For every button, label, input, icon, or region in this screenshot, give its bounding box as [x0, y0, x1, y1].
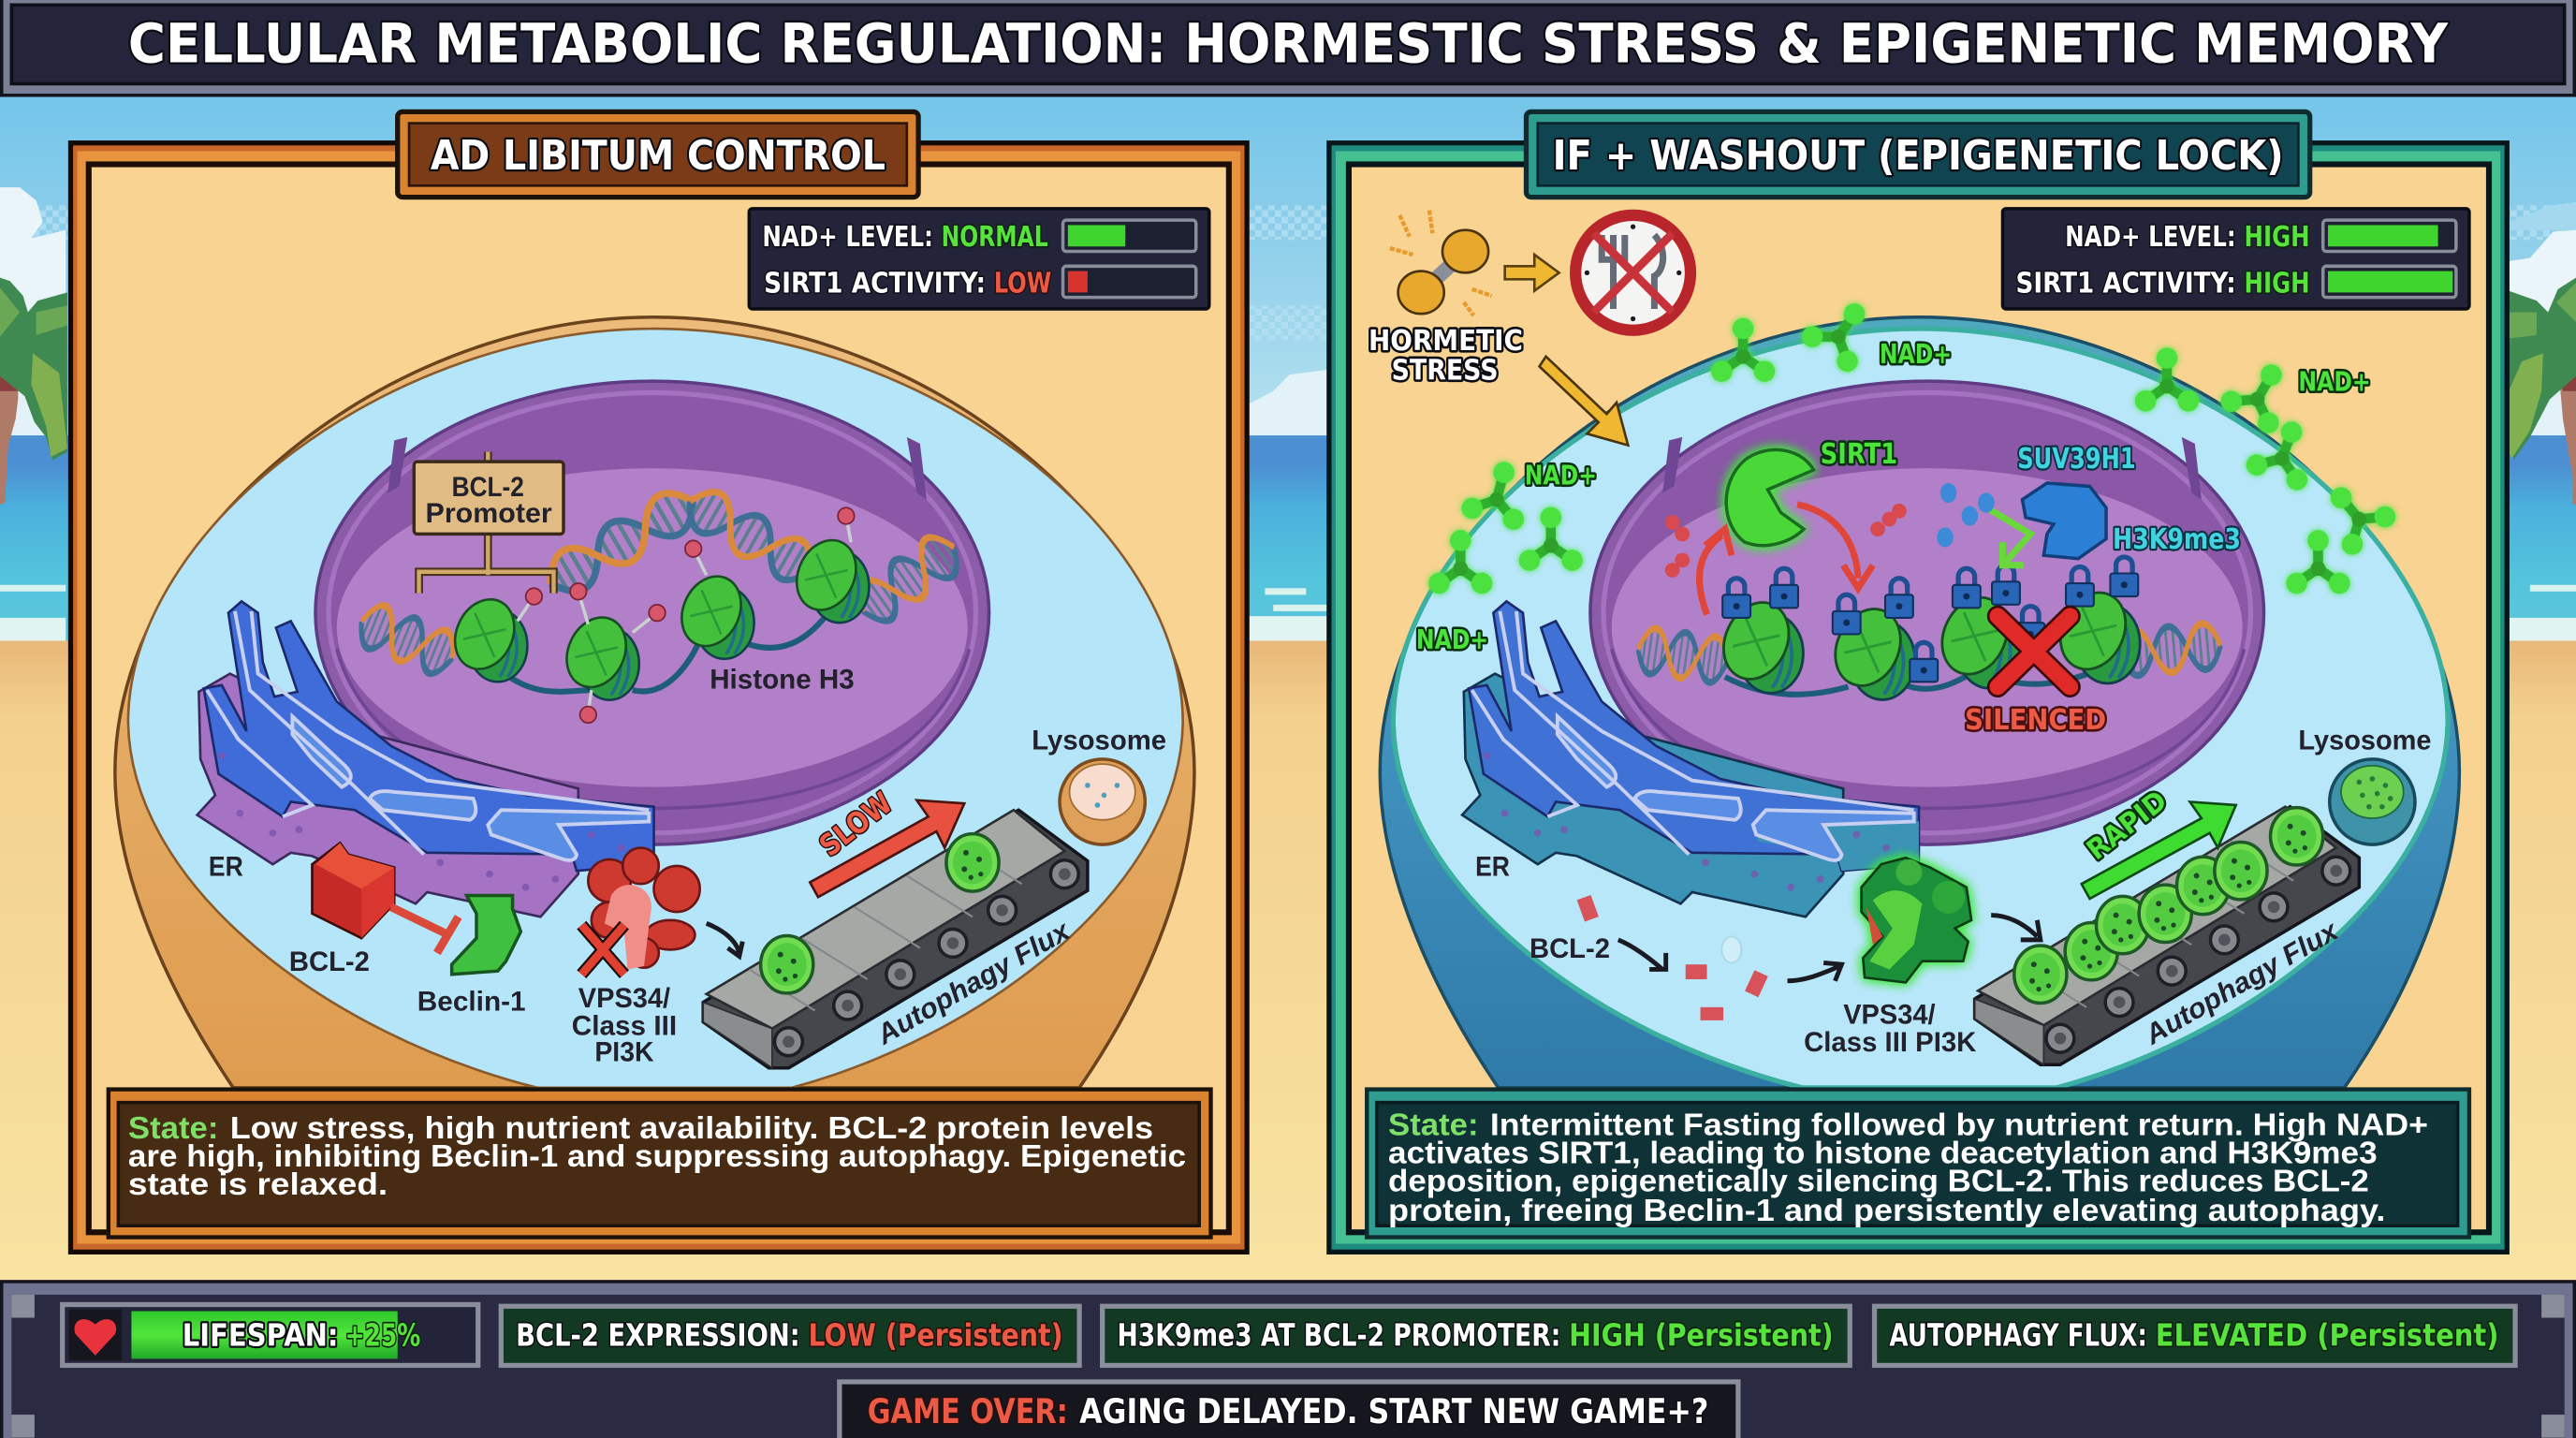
label: VPS34 / Class III PI3K — [572, 983, 677, 1068]
labels: NAD+: NAD+ — [1880, 339, 1952, 370]
label: Lysosome: Lysosome — [2298, 725, 2432, 756]
lifespan meter — [63, 1304, 478, 1365]
VPS34 complex, active — [1862, 858, 1971, 983]
status panel: NAD and SIRT1: SIRT1 ACTIVITY: — [2016, 267, 2236, 300]
badge: IF + washout — [1526, 111, 2310, 198]
icon: no food — [1575, 215, 1690, 330]
NAD+ molecules — [1428, 287, 2400, 594]
game over banner: GAME OVER: — [868, 1391, 1068, 1431]
label: BCL-2: BCL-2 — [289, 946, 370, 977]
status panel: NAD and SIRT1: LOW — [994, 267, 1051, 300]
state box: Low stress, high nutrient availability. BCL-2 protein levels — [230, 1111, 1153, 1146]
label: VPS34 / Class III PI3K: VPS34/ — [578, 983, 670, 1014]
labels: NAD+: NAD+ — [2298, 367, 2371, 398]
bottom HUD bar — [2, 1282, 2574, 1438]
state box — [1367, 1090, 2469, 1238]
Beclin-1 protein — [452, 895, 520, 975]
label: Lysosome: Lysosome — [1032, 725, 1166, 756]
label: VPS34 / Class III PI3K: VPS34/ — [1843, 999, 1936, 1030]
label: Autophagy Flux: Autophagy Flux — [871, 915, 1076, 1051]
game over banner — [840, 1382, 1738, 1438]
status panel: NAD and SIRT1: NAD+ LEVEL: — [2065, 221, 2236, 254]
labels: NAD+ — [1416, 339, 2371, 655]
endoplasmic reticulum — [1462, 601, 1919, 917]
SUV39H1 enzyme — [2023, 483, 2106, 559]
stat: H3K9me3 at promoter: H3K9me3 AT BCL-2 PROMOTER: — [1117, 1316, 1560, 1353]
state box: State: — [1388, 1108, 1479, 1143]
state box: activates SIRT1, leading to histone deacetylation and H3K9me3 — [1388, 1137, 2378, 1171]
status panel: NAD and SIRT1: HIGH — [2244, 267, 2310, 300]
state box: are high, inhibiting Beclin-1 and suppressing autophagy. Epigenetic — [128, 1139, 1186, 1174]
label: Beclin-1: Beclin-1 — [417, 986, 526, 1017]
panel: IF + washout — [1329, 111, 2507, 1252]
stat: BCL-2 expression: BCL-2 EXPRESSION: — [516, 1316, 800, 1353]
stat: BCL-2 expression — [501, 1306, 1079, 1365]
icon: dumbbell — [1390, 211, 1492, 315]
hormetic stress icon: HORMETIC — [1368, 325, 1523, 358]
stat: BCL-2 expression: LOW (Persistent) — [809, 1316, 1063, 1353]
label: VPS34 / Class III PI3K: Class III — [572, 1011, 677, 1042]
title bar — [2, 0, 2574, 95]
SIRT1 enzyme — [1726, 449, 1814, 546]
stat: autophagy flux: ELEVATED (Persistent) — [2156, 1316, 2499, 1353]
labels: NAD+: NAD+ — [1416, 624, 1488, 655]
arrow: stress to nucleus — [1540, 357, 1628, 446]
hormetic stress icon: STRESS — [1392, 354, 1499, 387]
status panel: NAD and SIRT1: NORMAL — [942, 221, 1048, 254]
badge: ad libitum control — [398, 111, 918, 198]
label: SLOW: SLOW — [813, 786, 899, 863]
title text: CELLULAR METABOLIC REGULATION: HORMESTIC STRESS & EPIGENETIC MEMORY — [128, 12, 2449, 76]
label: SIRT1: SIRT1 — [1821, 438, 1897, 471]
label: SUV39H1: SUV39H1 — [2017, 443, 2136, 476]
endoplasmic reticulum — [198, 601, 654, 917]
arrow: to fasting — [1505, 255, 1559, 291]
labels: NAD+: NAD+ — [1525, 461, 1597, 492]
cell — [1380, 317, 2459, 1088]
state box: Intermittent Fasting followed by nutrient return. High NAD+ — [1490, 1108, 2428, 1143]
lifespan meter: LIFESPAN: — [183, 1316, 339, 1353]
label: VPS34 / Class III PI3K: Class III PI3K — [1804, 1027, 1977, 1058]
arrow: slow — [810, 800, 964, 897]
status panel: NAD and SIRT1: SIRT1 ACTIVITY: — [764, 267, 986, 300]
conveyor: autophagy flux rapid — [1975, 807, 2359, 1064]
state box: State: — [128, 1111, 218, 1146]
label: SILENCED: SILENCED — [1965, 704, 2106, 737]
state box: state is relaxed. — [128, 1167, 388, 1202]
BCL-2 fragments and arrows — [1577, 895, 2041, 1020]
panel frame — [70, 143, 1247, 1252]
state box — [109, 1090, 1211, 1238]
label: VPS34 / Class III PI3K — [1804, 999, 1977, 1058]
nucleus — [315, 381, 989, 844]
stat: H3K9me3 at promoter — [1103, 1306, 1850, 1365]
arrow: rapid — [2082, 801, 2236, 899]
status panel: NAD and SIRT1 — [2002, 209, 2469, 309]
label: RAPID: RAPID — [2081, 785, 2174, 867]
state box: deposition, epigenetically silencing BCL-2. This reduces BCL-2 — [1388, 1164, 2369, 1198]
BCL-2 protein with inhibition bar — [312, 843, 459, 953]
stat: autophagy flux — [1875, 1306, 2515, 1365]
arrow to conveyor — [707, 923, 742, 956]
cell — [115, 317, 1194, 1088]
chromatin: silenced DNA with locks — [1634, 557, 2223, 699]
label: VPS34 / Class III PI3K: PI3K — [594, 1037, 654, 1068]
label: ER: ER — [1475, 851, 1510, 882]
status panel: NAD and SIRT1: HIGH — [2244, 221, 2310, 254]
badge: ad libitum control: AD LIBITUM CONTROL — [431, 132, 886, 180]
lysosome — [1060, 759, 1145, 844]
chromatin: relaxed DNA and nucleosomes — [353, 482, 967, 723]
label: BCL-2: BCL-2 — [1530, 933, 1610, 964]
cycle arrows and small molecules — [1665, 483, 2030, 614]
label: H3K9me3: H3K9me3 — [2113, 523, 2241, 556]
label: Histone H3: Histone H3 — [710, 664, 855, 695]
game over banner: AGING DELAYED. START NEW GAME+? — [1079, 1391, 1708, 1431]
sign: BCL-2 promoter: BCL-2 — [452, 472, 524, 503]
sign: BCL-2 promoter: Promoter — [426, 498, 552, 529]
nucleus — [1590, 381, 2264, 844]
state box: protein, freeing Beclin-1 and persistently elevating autophagy. — [1388, 1194, 2385, 1228]
palm tree: right — [2509, 278, 2576, 505]
hormetic stress icon — [1368, 211, 1523, 387]
lysosome — [2330, 759, 2415, 844]
stat: H3K9me3 at promoter: HIGH (Persistent) — [1569, 1316, 1834, 1353]
VPS34 complex, inhibited — [581, 848, 700, 975]
panel frame — [1329, 143, 2507, 1252]
conveyor: autophagy flux slow — [703, 810, 1088, 1068]
status panel: NAD and SIRT1: NAD+ LEVEL: — [762, 221, 933, 254]
panel: ad libitum control — [70, 111, 1247, 1252]
badge: IF + washout: IF + WASHOUT (EPIGENETIC LOCK) — [1553, 132, 2284, 180]
label: Autophagy Flux: Autophagy Flux — [2139, 915, 2345, 1051]
sign: BCL-2 promoter — [414, 452, 564, 594]
label: ER: ER — [209, 851, 243, 882]
red X silenced — [1998, 616, 2070, 687]
stat: autophagy flux: AUTOPHAGY FLUX: — [1889, 1316, 2147, 1353]
lifespan meter: +25% — [345, 1316, 420, 1353]
palm tree: left — [0, 278, 67, 505]
status panel: NAD and SIRT1 — [749, 209, 1209, 309]
